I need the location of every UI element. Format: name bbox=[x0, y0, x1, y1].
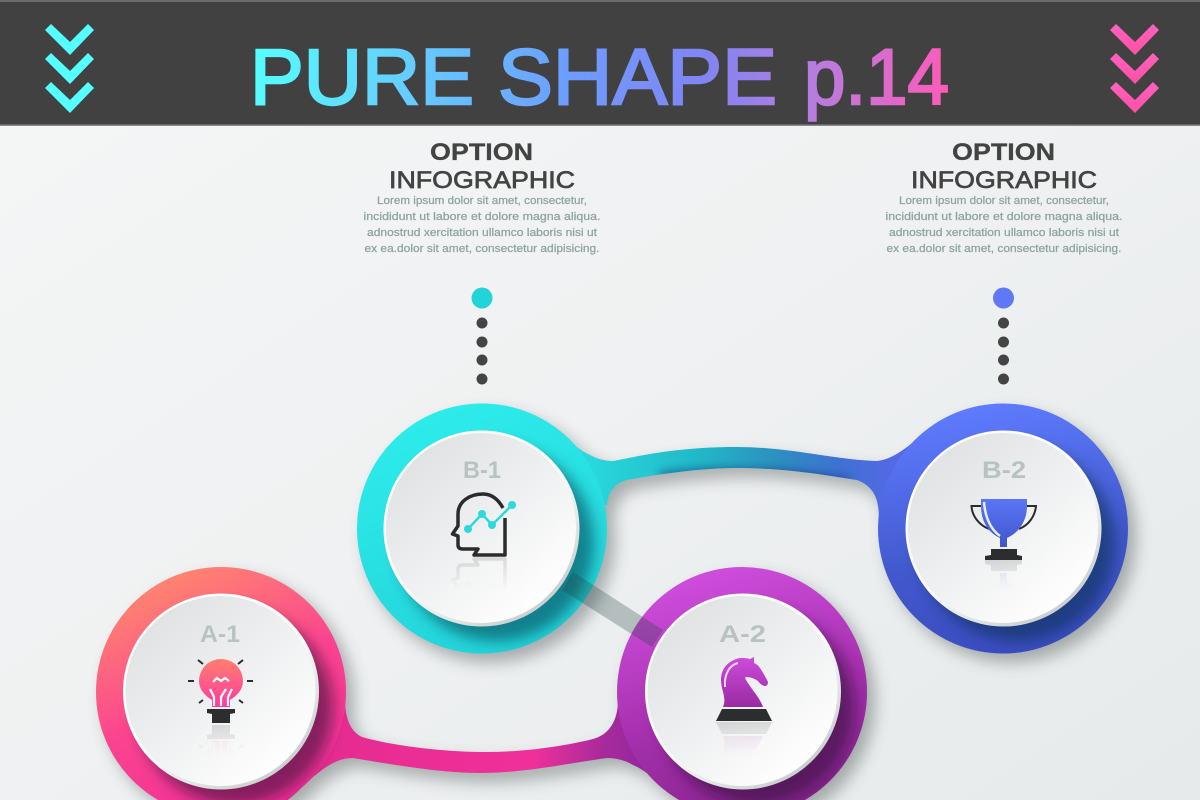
icon reflection B-2 bbox=[985, 560, 1022, 581]
disc B-1 bbox=[384, 430, 580, 626]
header band bbox=[0, 0, 1200, 126]
description: option B-1: ex ea.dolor sit amet, consectetur adipisicing. bbox=[364, 243, 600, 255]
icon: chess knight bbox=[716, 657, 772, 721]
icon reflection A-2 bbox=[716, 722, 772, 746]
heading: option B-2: OPTION bbox=[952, 139, 1055, 166]
connector shape A bbox=[96, 567, 867, 800]
disc shadows falling on shape A bbox=[137, 609, 855, 800]
node A-2 bbox=[645, 594, 841, 790]
heading: option B-2 bbox=[911, 139, 1097, 194]
connector B underside shading bbox=[660, 472, 850, 482]
description: option B-2: Lorem ipsum dolor sit amet, consectetur, bbox=[899, 195, 1109, 207]
dotted pointer: B-1 bbox=[472, 288, 492, 384]
ring A-1 bbox=[96, 567, 346, 800]
description: option B-2: incididunt ut labore et dolore magna aliqua. bbox=[886, 211, 1122, 223]
description: option B-1 bbox=[364, 195, 600, 255]
description: option B-2: ex ea.dolor sit amet, consectetur adipisicing. bbox=[886, 243, 1122, 255]
node B-1 bbox=[384, 430, 580, 626]
label A-1: A-1 bbox=[200, 621, 240, 648]
diagonal link bar bbox=[562, 572, 663, 647]
disc A-2 bbox=[645, 594, 841, 790]
ring A-2 bbox=[617, 567, 867, 800]
disc shadows falling on shape B bbox=[398, 445, 1115, 641]
text block: option B-1 bbox=[364, 139, 600, 255]
description: option B-1: Lorem ipsum dolor sit amet, consectetur, bbox=[377, 195, 587, 207]
heading: option B-1 bbox=[389, 139, 575, 194]
text block: option B-2 bbox=[886, 139, 1122, 255]
ring B-1 bbox=[357, 404, 607, 654]
heading: option B-1: INFOGRAPHIC bbox=[389, 167, 575, 194]
heading: option B-2: INFOGRAPHIC bbox=[911, 167, 1097, 194]
description: option B-1: incididunt ut labore et dolore magna aliqua. bbox=[364, 211, 600, 223]
icon reflection A-1 bbox=[199, 725, 243, 746]
description: option B-1: adnostrud xercitation ullamco laboris nisi ut bbox=[367, 227, 597, 239]
icon: trophy bbox=[972, 499, 1036, 560]
icon: cyan chevrons bbox=[45, 24, 94, 113]
label B-1: B-1 bbox=[463, 457, 501, 484]
label A-2: A-2 bbox=[719, 621, 766, 648]
description: option B-2: adnostrud xercitation ullamco laboris nisi ut bbox=[889, 227, 1119, 239]
ground shadow of rings bbox=[104, 412, 1136, 800]
icon: pink chevrons bbox=[1110, 24, 1159, 113]
icon reflection B-1 bbox=[451, 557, 507, 580]
dotted pointer: B-2 bbox=[993, 288, 1014, 384]
description: option B-2 bbox=[886, 195, 1122, 255]
connector shape B bbox=[357, 404, 1128, 654]
node A-1 bbox=[123, 594, 319, 790]
title: PURE bbox=[250, 32, 474, 121]
title bbox=[250, 32, 949, 121]
ring B-2 bbox=[878, 404, 1128, 654]
node B-2 bbox=[906, 430, 1102, 626]
icon: light bulb bbox=[188, 659, 253, 723]
disc B-2 bbox=[906, 430, 1102, 626]
disc A-1 bbox=[123, 594, 319, 790]
heading: option B-1: OPTION bbox=[430, 139, 533, 166]
title: SHAPE bbox=[498, 32, 777, 121]
icon: head with chart bbox=[452, 494, 516, 555]
title: p.14 bbox=[804, 32, 949, 121]
label B-2: B-2 bbox=[982, 457, 1026, 484]
